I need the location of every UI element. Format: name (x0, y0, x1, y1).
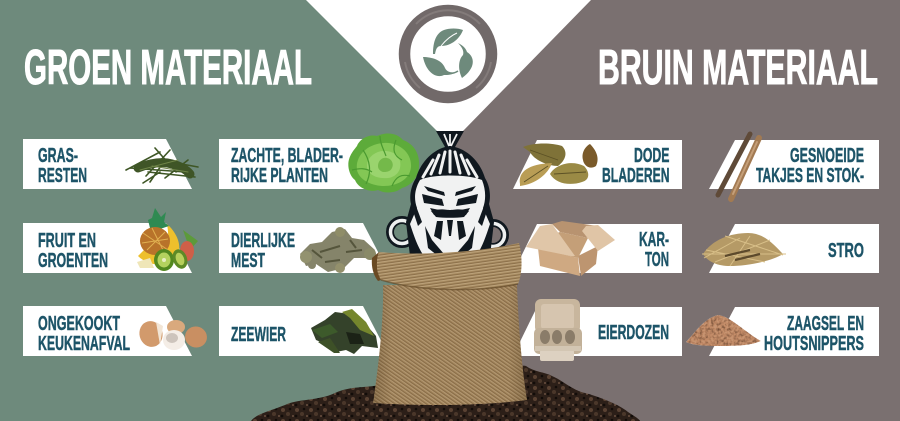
panel: dierlijke mest (219, 223, 389, 273)
sack body (373, 285, 527, 405)
text: karton: TON (645, 248, 669, 271)
icon: egg carton (534, 299, 582, 361)
text: dierlijke mest: MEST (231, 249, 265, 272)
panel: stro (702, 224, 879, 273)
ear rings (390, 220, 505, 247)
icon: recycling leaves badge (404, 10, 492, 98)
panel: zaagsel en houtsnippers (686, 307, 879, 356)
text: ongekookt keukenafval (38, 312, 130, 355)
text: karton (639, 228, 669, 271)
burlap sack (372, 243, 527, 405)
background: brown panel (450, 0, 900, 421)
panel: zachte, bladerrijke planten (219, 133, 419, 192)
text: fruit en groenten: FRUIT EN (38, 229, 96, 252)
panel: grasresten (23, 139, 198, 189)
text: dierlijke mest (231, 229, 295, 272)
mask logo (390, 131, 505, 256)
sack collar (377, 243, 522, 290)
icon: lettuce (348, 133, 419, 192)
heading: groen materiaal: GROEN MATERIAAL (24, 40, 312, 95)
text: dierlijke mest: DIERLIJKE (231, 229, 295, 252)
panel: ongekookt keukenafval (23, 306, 210, 356)
panel: zeewier (219, 306, 389, 356)
text: ongekookt keukenafval: ONGEKOOKT (38, 312, 120, 335)
panel: fruit en groenten (23, 208, 198, 273)
text: zaagsel en houtsnippers (764, 312, 864, 355)
face (410, 176, 490, 256)
panel: karton (513, 221, 682, 276)
background: green panel (0, 0, 450, 421)
knot and head silhouette (406, 131, 494, 256)
icon: manure (300, 227, 376, 273)
icon: egg shells (137, 318, 210, 351)
icon: cardboard box (526, 221, 615, 276)
face markings (414, 186, 486, 256)
text: zeewier: ZEEWIER (231, 323, 286, 346)
background: white centre triangle (306, 0, 591, 131)
text: zachte, bladerrijke planten (231, 144, 343, 187)
text: grasresten (38, 144, 87, 187)
text: zachte, bladerrijke planten: ZACHTE, BLADER- (231, 144, 343, 167)
icon: grass clippings (126, 148, 198, 183)
text: zachte, bladerrijke planten: RIJKE PLANTEN (231, 164, 328, 187)
text: ongekookt keukenafval: KEUKENAFVAL (38, 332, 130, 355)
soil mound (251, 366, 640, 421)
text: dode bladeren: DODE (634, 144, 670, 167)
hair stripes (423, 151, 477, 177)
text: eierdozen: EIERDOZEN (598, 321, 669, 344)
text: fruit en groenten (38, 229, 108, 272)
knot stripes (444, 134, 457, 146)
text: stro: STRO (828, 239, 864, 262)
text: fruit en groenten: GROENTEN (38, 249, 108, 272)
icon: wood chips (686, 315, 761, 346)
text: dode bladeren: BLADEREN (602, 164, 670, 187)
text: karton: KAR- (639, 228, 669, 251)
panel: dode bladeren (513, 140, 682, 189)
text: grasresten: RESTEN (38, 164, 87, 187)
panel: gesnoeide takjes en stokjes (709, 134, 879, 199)
icon: seaweed (311, 309, 378, 354)
icon: fruit (137, 208, 198, 271)
icon: sticks (718, 134, 759, 199)
text: grasresten: GRAS- (38, 144, 78, 167)
icon: dead leaves (520, 143, 598, 186)
text: dode bladeren (602, 144, 670, 187)
panel: eierdozen (513, 299, 682, 361)
text: gesnoeide takjes en stok- (756, 144, 864, 187)
icon: straw pile (702, 233, 786, 266)
